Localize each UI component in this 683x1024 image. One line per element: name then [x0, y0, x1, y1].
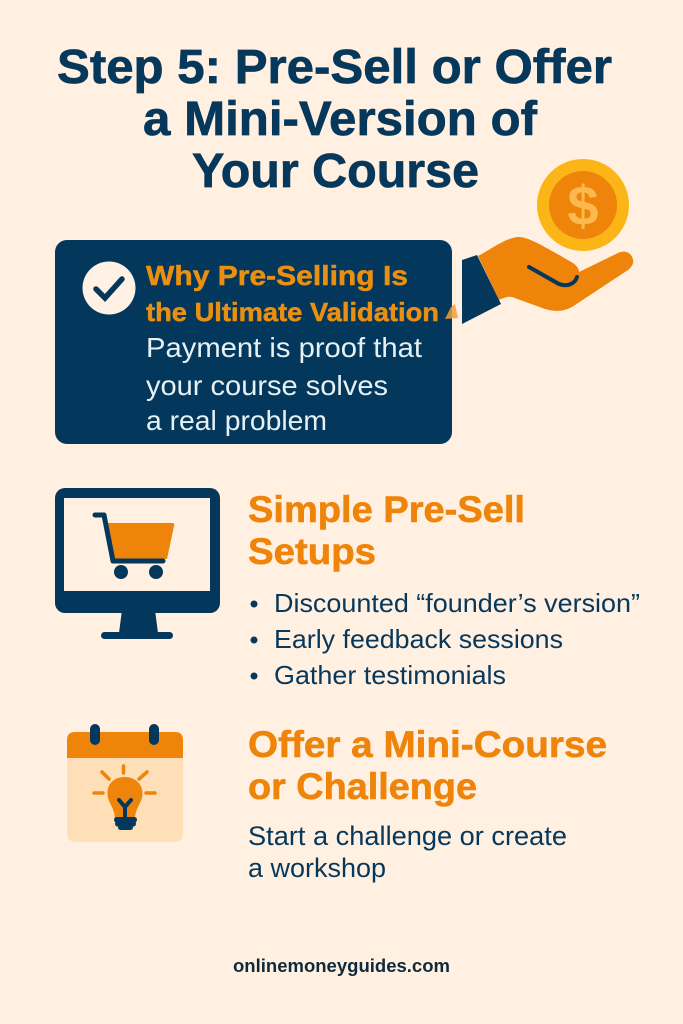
panel body text [146, 332, 422, 436]
panel: why pre-selling [55, 240, 452, 444]
mini-course body text: a workshop [248, 853, 386, 883]
heading: offer a mini-course: or Challenge [248, 766, 477, 807]
icon: hand holding coin [462, 237, 633, 324]
mini-course body text: Start a challenge or create [248, 821, 567, 851]
heading: simple pre-sell setups: Simple Pre-Sell [248, 489, 525, 530]
heading: simple pre-sell setups: Setups [248, 531, 376, 572]
icon: calendar with light bulb [67, 724, 183, 842]
light bulb [94, 766, 155, 830]
bullet list [250, 588, 640, 690]
shopping cart [95, 515, 174, 579]
heading: simple pre-sell setups [248, 489, 525, 572]
panel heading: the Ultimate Validation [146, 297, 439, 327]
heading: offer a mini-course [248, 724, 607, 807]
bullet list: Gather testimonials [274, 660, 506, 690]
title: Your Course [192, 145, 479, 198]
panel body text: Payment is proof that [146, 332, 422, 363]
icon: gold dollar coin [537, 159, 629, 251]
icon: gold dollar coin: $ [567, 174, 599, 237]
icon: check mark [82, 262, 136, 314]
panel heading [146, 260, 439, 327]
icon: monitor with shopping cart [55, 488, 220, 639]
title: Step 5: Pre-Sell or Offer [57, 41, 612, 94]
panel body text: your course solves [146, 370, 388, 401]
small orange mark at panel edge [445, 304, 458, 319]
mini-course body text [248, 821, 567, 883]
heading: offer a mini-course: Offer a Mini-Course [248, 724, 607, 765]
title: a Mini-Version of [143, 93, 538, 146]
bullet list: Early feedback sessions [274, 624, 563, 654]
footer website: onlinemoneyguides.com [233, 956, 450, 976]
panel body text: a real problem [146, 405, 327, 436]
panel heading: Why Pre-Selling Is [146, 260, 408, 291]
bullet list: Discounted “founder’s version” [274, 588, 640, 618]
title [57, 41, 612, 198]
